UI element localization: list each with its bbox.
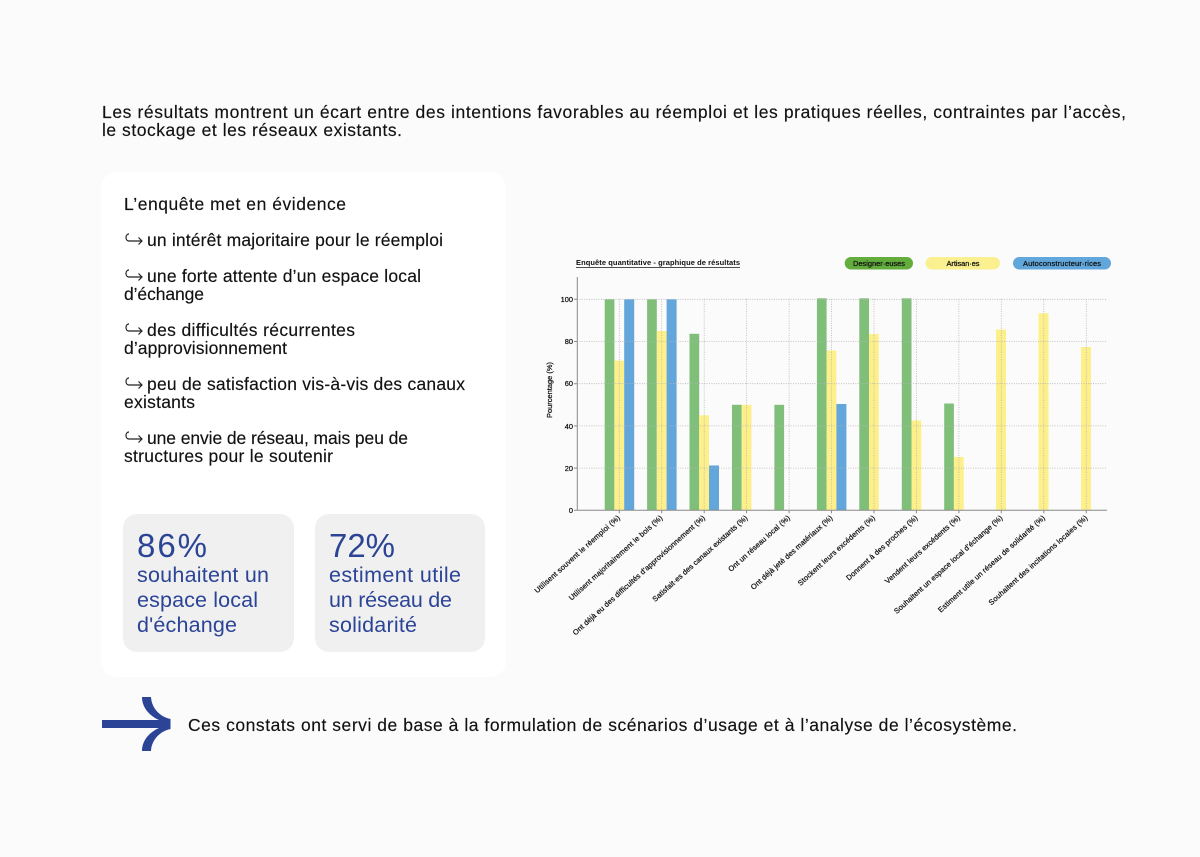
x axis category labels: Ont déjà jeté des matériaux (%): [749, 513, 834, 592]
y axis labels: 100: [561, 295, 573, 304]
chart axes: [574, 277, 1107, 513]
yellow bars: artisans: [614, 313, 1091, 510]
legend: artisans: Artisan·es: [946, 259, 980, 268]
green bars: designers: [605, 298, 954, 510]
finding: low satisfaction: existants: [124, 392, 195, 412]
legend: designers: Designer·euses: [853, 259, 905, 268]
legend: artisans: [926, 257, 1000, 270]
x axis category labels: Souhaitent des incitations locales (%): [987, 513, 1089, 607]
x axis category labels: Estiment utile un réseau de solidarité (%): [936, 513, 1047, 614]
x axis category labels: Satisfait·es des canaux existants (%): [650, 513, 749, 604]
x axis category labels: Vendent leurs excédents (%): [883, 513, 962, 586]
conclusion text: Ces constats ont servi de base à la formulation de scénarios d’usage et à l’analyse de l’écosystème.: [188, 715, 1017, 735]
icon: conclusion arrow: [102, 697, 170, 751]
y axis labels: 0: [569, 506, 573, 515]
finding: local exchange space: [124, 266, 421, 304]
stat card: 72%: solidarité: [329, 613, 417, 637]
panel: survey findings: [101, 172, 506, 677]
intro text: Les résultats montrent un écart entre des intentions favorables au réemploi et les pratiques réelles, contraintes par l’accès,: [102, 102, 1126, 122]
bar chart: quantitative survey results: [533, 257, 1111, 637]
x axis category labels: Utilisent souvent le réemploi (%): [533, 513, 622, 595]
finding: network wish: une envie de réseau, mais peu de: [147, 428, 408, 448]
stat card: 86%: souhaitent un: [137, 563, 269, 587]
finding: network wish: [124, 428, 408, 466]
stat card: 86%: 86%: [137, 527, 207, 564]
stat card: 72%: estiment utile: [329, 563, 461, 587]
stat card: 86%: [123, 514, 294, 652]
finding: interest in reuse: un intérêt majoritaire pour le réemploi: [147, 230, 443, 250]
panel background: [101, 172, 506, 677]
blue bars: self-builders: [624, 299, 846, 510]
stat card: 86%: d'échange: [137, 613, 237, 637]
x axis category labels: Stockent leurs excédents (%): [796, 513, 877, 588]
intro text: [102, 102, 1126, 140]
x axis category labels: Ont déjà eu des difficultés d’approvisionnement (%): [571, 513, 707, 637]
y axis labels: 60: [565, 379, 573, 388]
legend: [845, 257, 1111, 270]
x axis category labels: Donnent à des proches (%): [844, 513, 919, 582]
finding: local exchange space: une forte attente d’un espace local: [147, 266, 421, 286]
x axis category labels: Souhaitent un espace local d’échange (%): [892, 513, 1004, 616]
chart title: Enquête quantitative - graphique de résultats: [576, 258, 740, 267]
stat card: 86%: espace local: [137, 588, 258, 612]
finding: network wish: structures pour le soutenir: [124, 446, 333, 466]
x axis category labels: Ont un réseau local (%): [726, 513, 792, 574]
finding: supply difficulties: des difficultés récurrentes: [147, 320, 355, 340]
finding: supply difficulties: d’approvisionnement: [124, 338, 287, 358]
finding: supply difficulties: [124, 320, 355, 358]
finding: low satisfaction: peu de satisfaction vis-à-vis des canaux: [147, 374, 465, 394]
legend: self-builders: Autoconstructeur·rices: [1023, 259, 1101, 268]
x axis category labels: [533, 513, 1089, 637]
y axis labels: 20: [565, 464, 573, 473]
legend: designers: [845, 257, 913, 270]
intro text: le stockage et les réseaux existants.: [102, 120, 402, 140]
stat card: 72%: 72%: [329, 527, 395, 564]
finding: local exchange space: d’échange: [124, 284, 204, 304]
finding: low satisfaction: [124, 374, 465, 412]
stat card: 72%: un réseau de: [329, 588, 452, 612]
panel heading: L’enquête met en évidence: [124, 194, 346, 214]
legend: self-builders: [1013, 257, 1111, 270]
stat card: 72%: [315, 514, 485, 652]
y axis labels: [561, 295, 573, 515]
x axis category labels: Utilisent majoritairement le bois (%): [567, 513, 664, 602]
y axis labels: 40: [565, 422, 573, 431]
y axis title: Pourcentage (%): [545, 362, 554, 418]
y axis labels: 80: [565, 337, 573, 346]
